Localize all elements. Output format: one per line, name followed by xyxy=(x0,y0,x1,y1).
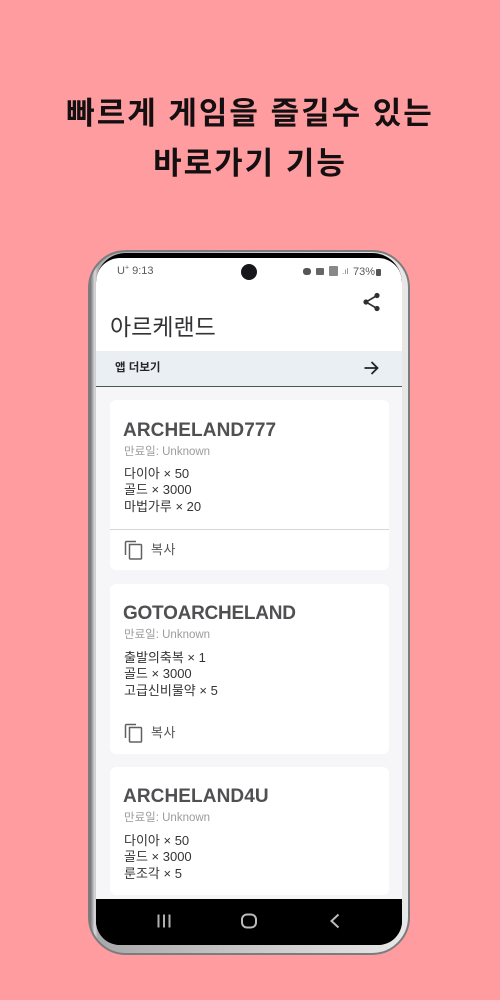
icon: back xyxy=(330,914,340,928)
expiry: 만료일: Unknown xyxy=(124,629,210,641)
app content xyxy=(96,286,402,899)
icon: arrow xyxy=(364,361,379,375)
app header xyxy=(96,286,402,351)
copy label: 복사 xyxy=(151,542,176,557)
screen xyxy=(96,253,402,945)
panel: coupon 2 xyxy=(110,584,389,754)
icon: copy xyxy=(124,724,142,743)
reward list: 골드 × 3000 xyxy=(124,482,192,497)
expiry: 만료일: Unknown xyxy=(124,812,210,824)
reward list: 골드 × 3000 xyxy=(124,849,192,864)
coupon code: GOTOARCHELAND xyxy=(123,603,296,624)
phone mockup xyxy=(88,250,410,955)
divider xyxy=(110,529,389,530)
copy label: 복사 xyxy=(151,725,176,740)
reward list: 고급신비물약 × 5 xyxy=(124,683,218,698)
reward list: 출발의축복 × 1 xyxy=(124,650,206,665)
icon: recent apps xyxy=(158,914,170,928)
title xyxy=(66,96,434,181)
status bar xyxy=(96,258,402,288)
reward list xyxy=(124,650,218,698)
more apps bar xyxy=(96,351,402,387)
reward list: 다이아 × 50 xyxy=(124,833,189,848)
icon: share xyxy=(363,292,380,312)
camera xyxy=(241,264,257,280)
icon: home xyxy=(241,914,257,928)
status icons: .ıl xyxy=(342,267,348,276)
coupon code: ARCHELAND777 xyxy=(123,420,276,441)
panel: coupon 1 xyxy=(110,400,389,570)
icon: copy xyxy=(124,540,142,560)
reward list: 룬조각 × 5 xyxy=(124,866,182,881)
status icons: 73% xyxy=(353,266,375,278)
more apps label: 앱 더보기 xyxy=(115,362,161,374)
reward list xyxy=(124,833,192,881)
reward list: 골드 × 3000 xyxy=(124,666,192,681)
app title: 아르케랜드 xyxy=(110,314,216,340)
reward list: 다이아 × 50 xyxy=(124,466,189,481)
panel: coupon 3 xyxy=(110,767,389,895)
title: 바로가기 기능 xyxy=(153,146,347,181)
status icons xyxy=(303,266,381,278)
title: 빠르게 게임을 즐길수 있는 xyxy=(66,96,434,131)
reward list xyxy=(124,466,201,514)
reward list: 마법가루 × 20 xyxy=(124,499,201,514)
coupon code: ARCHELAND4U xyxy=(123,786,269,807)
expiry: 만료일: Unknown xyxy=(124,446,210,458)
carrier and clock: U+ 9:13 xyxy=(117,264,154,277)
navigation bar xyxy=(96,899,402,945)
